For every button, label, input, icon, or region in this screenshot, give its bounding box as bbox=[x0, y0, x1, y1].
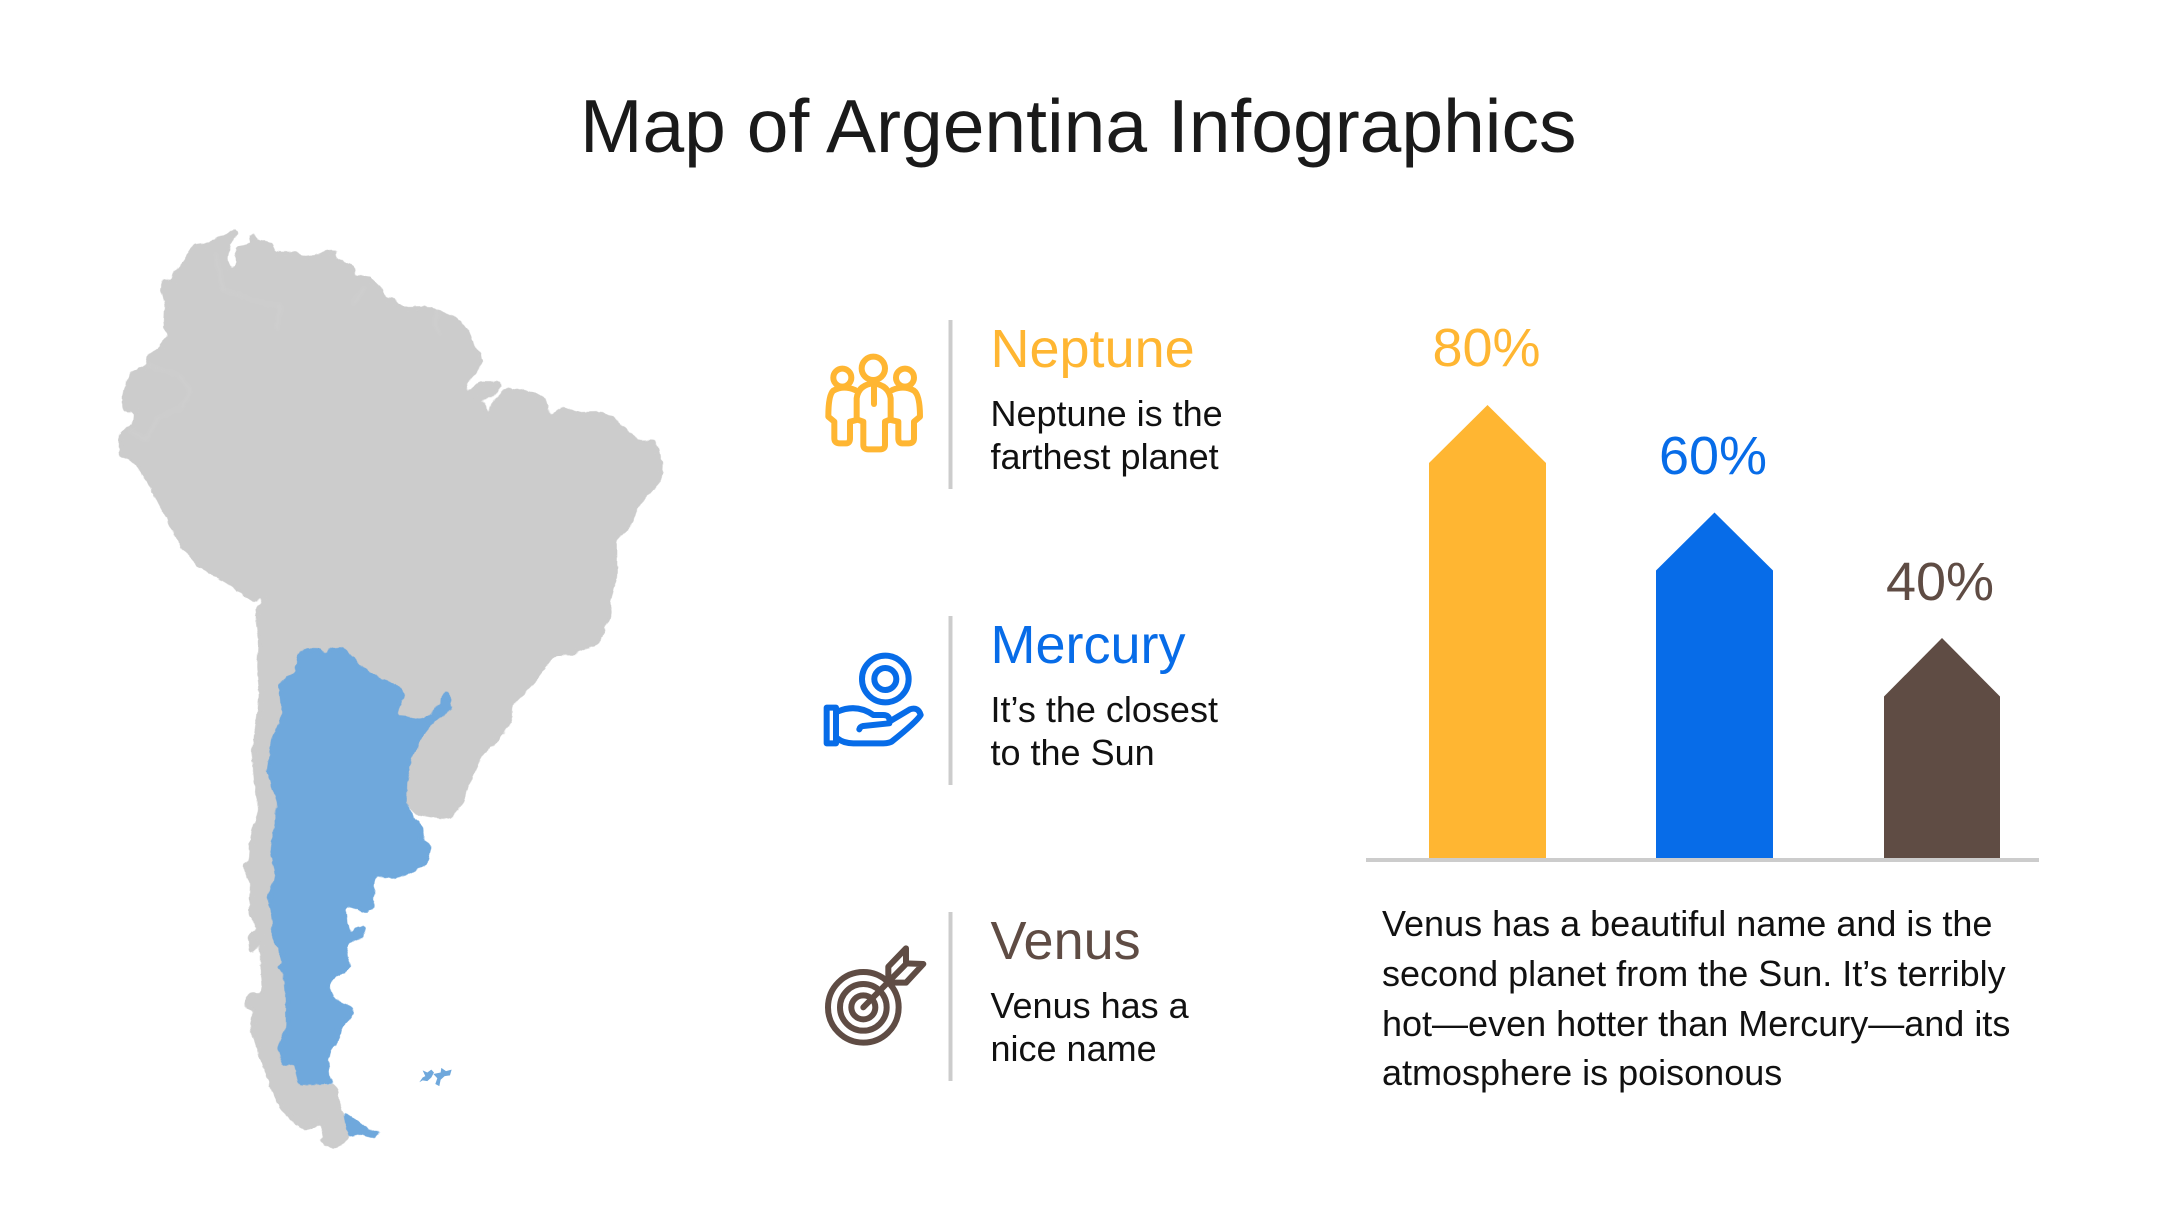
axis bbox=[1366, 858, 2039, 862]
item: Venus bbox=[828, 911, 1190, 1081]
heading: Neptune: Neptune bbox=[990, 319, 1195, 379]
bar: 80% bbox=[1429, 318, 1546, 859]
text: Mercury description: It’s the closest bbox=[990, 689, 1218, 730]
bar: 40%: 40% bbox=[1886, 552, 1994, 612]
divider bbox=[948, 616, 952, 785]
text: Venus paragraph: atmosphere is poisonous bbox=[1382, 1052, 1782, 1093]
text: Venus description: Venus has a bbox=[990, 985, 1190, 1026]
text: Venus paragraph: Venus has a beautiful name and is the bbox=[1382, 903, 1992, 944]
bar: 60% bbox=[1656, 426, 1773, 859]
item: Mercury bbox=[827, 615, 1218, 785]
text: Venus paragraph: hot—even hotter than Mercury—and its bbox=[1382, 1003, 2010, 1044]
divider bbox=[948, 912, 952, 1081]
map: Argentina bbox=[267, 647, 453, 1139]
map: South America with Argentina highlighted bbox=[118, 228, 663, 1151]
map: South America land bbox=[118, 228, 663, 1151]
text: Mercury description: to the Sun bbox=[990, 732, 1155, 773]
bar chart bbox=[1366, 318, 2039, 862]
bar: 60%: 60% bbox=[1659, 426, 1767, 486]
heading: Venus: Venus bbox=[990, 911, 1141, 971]
map: Falkland Islands bbox=[419, 1068, 452, 1086]
item: Neptune bbox=[828, 319, 1223, 489]
divider bbox=[948, 320, 952, 489]
text: Venus description: nice name bbox=[990, 1028, 1157, 1069]
text: Neptune description: Neptune is the bbox=[990, 393, 1223, 434]
text: Neptune description: farthest planet bbox=[990, 436, 1219, 477]
title: Map of Argentina Infographics bbox=[580, 84, 1576, 168]
icon: hand with coin bbox=[827, 656, 921, 743]
bar: 80%: 80% bbox=[1432, 318, 1541, 378]
heading: Mercury: Mercury bbox=[990, 615, 1186, 675]
text: Venus paragraph: second planet from the Sun. It’s terribly bbox=[1382, 953, 2006, 994]
icon: people bbox=[828, 357, 920, 449]
icon: target with arrow bbox=[828, 948, 923, 1043]
bar: 40% bbox=[1884, 552, 2000, 859]
